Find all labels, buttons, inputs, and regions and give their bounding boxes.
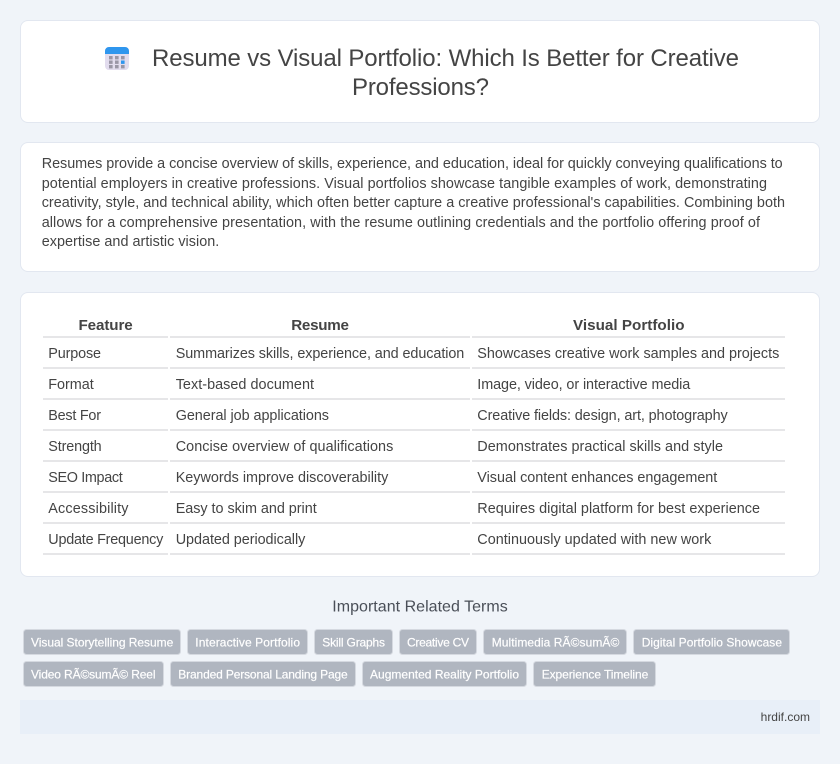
text block: summary bbox=[42, 156, 785, 250]
footer source: hrdif.com bbox=[761, 710, 810, 724]
text block: summary: expertise and artistic vision. bbox=[42, 234, 219, 250]
column: resume: Concise overview of qualifications bbox=[176, 439, 393, 455]
column: feature: Accessibility bbox=[48, 501, 129, 517]
column: visual portfolio: Image, video, or interactive media bbox=[477, 377, 690, 393]
column: visual portfolio: Demonstrates practical skills and style bbox=[477, 439, 723, 455]
table header bbox=[78, 317, 684, 334]
tag list: Visual Storytelling Resume bbox=[31, 636, 174, 650]
panel: intro text bbox=[20, 142, 820, 272]
tag list: Multimedia RÃ©sumÃ© bbox=[492, 636, 619, 650]
table header: Visual Portfolio bbox=[573, 317, 684, 334]
text block: summary: allows for a comprehensive presentation, with the resume outlining credentials and the portfolio offering proof of bbox=[42, 215, 761, 231]
text block: summary: potential employers in creative professions. Visual portfolios showcase tangible examples of work, demonstrating bbox=[42, 176, 767, 192]
text block: summary: creativity, style, and technical ability, which often better capture a creative professional's capabilities. Combining both bbox=[42, 195, 785, 211]
tag list: Augmented Reality Portfolio bbox=[370, 668, 519, 682]
table header: Feature bbox=[78, 317, 133, 334]
panel: title card bbox=[20, 20, 820, 123]
icon: calendar bbox=[105, 47, 129, 70]
title: Resume vs Visual Portfolio: Which Is Better for Creative bbox=[152, 45, 739, 72]
column: resume: Summarizes skills, experience, and education bbox=[176, 346, 464, 362]
column: feature: SEO Impact bbox=[48, 470, 123, 486]
column: feature bbox=[48, 346, 164, 548]
column: feature: Strength bbox=[48, 439, 102, 455]
column: visual portfolio: Creative fields: design, art, photography bbox=[477, 408, 728, 424]
column: resume: Easy to skim and print bbox=[176, 501, 317, 517]
tag list: Creative CV bbox=[407, 636, 469, 650]
tag list: Experience Timeline bbox=[542, 668, 649, 682]
footer bar bbox=[20, 700, 820, 734]
tag list: Digital Portfolio Showcase bbox=[642, 636, 782, 650]
column: visual portfolio: Continuously updated with new work bbox=[477, 532, 712, 548]
column: resume: Text-based document bbox=[176, 377, 314, 393]
title bbox=[152, 45, 739, 101]
column: resume: Keywords improve discoverability bbox=[176, 470, 389, 486]
tag list: Skill Graphs bbox=[322, 636, 385, 650]
column: feature: Update Frequency bbox=[48, 532, 164, 548]
column: visual portfolio bbox=[477, 346, 779, 548]
column: visual portfolio: Visual content enhances engagement bbox=[477, 470, 717, 486]
title: Professions? bbox=[352, 74, 489, 101]
panel: comparison table bbox=[20, 292, 820, 577]
table: resume vs portfolio bbox=[43, 317, 785, 555]
column: feature: Purpose bbox=[48, 346, 101, 362]
column: feature: Best For bbox=[48, 408, 101, 424]
heading: related terms: Important Related Terms bbox=[332, 598, 508, 616]
column: visual portfolio: Showcases creative work samples and projects bbox=[477, 346, 779, 362]
tag list bbox=[23, 629, 790, 687]
column: resume: General job applications bbox=[176, 408, 329, 424]
tag list: Video RÃ©sumÃ© Reel bbox=[31, 668, 156, 682]
column: visual portfolio: Requires digital platform for best experience bbox=[477, 501, 760, 517]
text block: summary: Resumes provide a concise overview of skills, experience, and education, ideal for quickly conveying qualifications to bbox=[42, 156, 783, 172]
column: resume bbox=[176, 346, 464, 548]
column: resume: Updated periodically bbox=[176, 532, 306, 548]
tag list: Branded Personal Landing Page bbox=[178, 668, 348, 682]
column: feature: Format bbox=[48, 377, 94, 393]
tag list: Interactive Portfolio bbox=[195, 636, 300, 650]
table header: Resume bbox=[291, 317, 349, 334]
